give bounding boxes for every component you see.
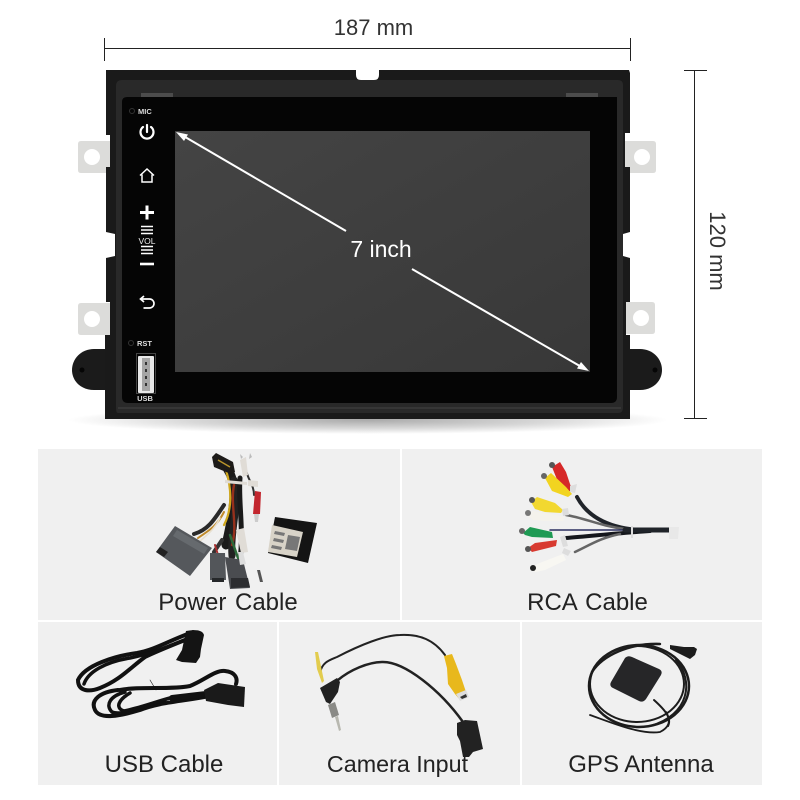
- panel: RCA cable: [402, 449, 762, 620]
- GPS cable coil: [589, 644, 689, 732]
- end connector: [176, 630, 204, 663]
- RCA cable photo: [519, 462, 679, 572]
- icon: home: [140, 169, 154, 182]
- USB cable coil: [78, 632, 237, 716]
- label: USB Cable: [105, 751, 223, 778]
- small connector: [210, 553, 226, 580]
- connector block: [669, 527, 679, 539]
- icon: plus: [140, 206, 154, 220]
- antenna puck: [610, 656, 662, 702]
- device shadow: [68, 406, 668, 434]
- second small connector: [225, 557, 250, 589]
- icon: back: [140, 296, 154, 308]
- side buttons: [128, 107, 156, 403]
- label: Camera Input: [327, 751, 469, 777]
- yellow plug top: [545, 473, 572, 497]
- dimension: width 187 mm: 187 mm: [334, 15, 413, 40]
- USB port: USB: [137, 394, 153, 403]
- antenna plug: [670, 645, 697, 659]
- RST label: [128, 339, 152, 348]
- wire bundle: [194, 470, 254, 560]
- label: RCA Cable: [527, 589, 648, 616]
- white plug lower: [532, 554, 566, 572]
- RST label: RST: [137, 339, 152, 348]
- screen: [175, 131, 590, 372]
- volume bars: [141, 226, 153, 254]
- green plug: [523, 527, 553, 538]
- panel: GPS antenna: [522, 622, 762, 785]
- device: head unit: [68, 70, 668, 434]
- white plug: [528, 511, 565, 521]
- panel: power cable: [38, 449, 400, 620]
- icon: power: [140, 125, 154, 139]
- top clips: [141, 93, 173, 97]
- dimension: height 120 mm: 120 mm: [705, 211, 730, 291]
- harness photo: [156, 453, 317, 589]
- MIC label: [130, 107, 152, 116]
- white clips: [225, 457, 258, 553]
- red plug lower: [528, 540, 557, 552]
- main connector: [156, 526, 212, 576]
- label: GPS Antenna: [568, 751, 714, 778]
- side ears: [72, 349, 106, 390]
- panel: camera input: [279, 622, 520, 785]
- icon: minus: [140, 263, 154, 265]
- yellow tag: [315, 652, 324, 683]
- yellow RCA: [444, 654, 468, 700]
- outer housing: [105, 70, 630, 419]
- mounting tabs: [78, 141, 656, 335]
- yellow plug middle: [531, 497, 563, 513]
- USB plug: [204, 683, 245, 707]
- inner frame: [116, 80, 623, 413]
- red plug top: [552, 462, 572, 492]
- screen size label: 7 inch: [350, 236, 412, 262]
- antenna plug: [320, 678, 340, 704]
- label: Power Cable: [158, 589, 298, 616]
- top connector: [212, 453, 235, 474]
- Fakra connector: [457, 720, 483, 757]
- glass face: [122, 97, 617, 403]
- diagonal arrow: [176, 132, 589, 371]
- panel: USB cable: [38, 622, 277, 785]
- MIC label: MIC: [138, 107, 152, 116]
- USB port: [136, 354, 156, 403]
- VOL label: VOL: [138, 236, 156, 246]
- white tags: [560, 484, 577, 556]
- camera cable: [320, 635, 463, 722]
- red RCA plug: [253, 491, 261, 514]
- decoder box: [268, 517, 317, 563]
